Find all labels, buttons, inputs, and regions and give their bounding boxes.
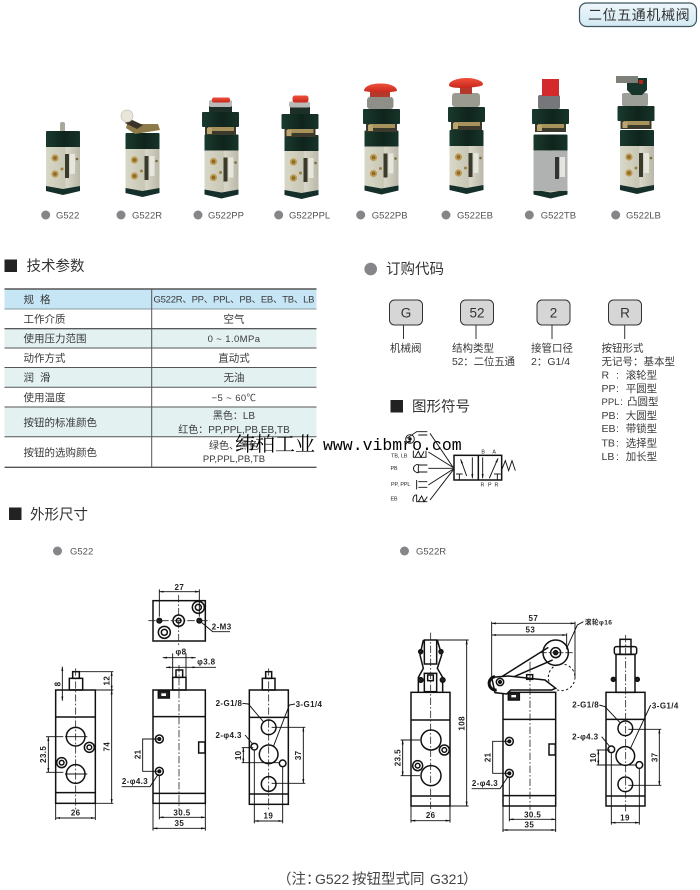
code box: 2: 2：G1/4 [531,356,570,368]
product: G522EB: G522EB [457,210,493,222]
code box: 52: 52：二位五通 [452,355,516,368]
watermark [235,433,462,456]
footnote: G321 [430,871,464,887]
product: G522EB [442,78,493,222]
footnote: （注： [277,871,320,888]
right view: 10 [234,750,243,760]
heading: outline dimensions [9,506,88,524]
right view [572,635,679,825]
left view: 26 [426,811,436,820]
table row labels: 按钮的选购颜色 [24,446,97,459]
right view: 37 [294,750,303,760]
valve graphic symbol: EB [390,497,398,503]
heading: technical parameters [4,258,85,275]
left view [394,633,469,823]
top view: 27 [174,583,184,592]
code box: R: : [616,410,619,422]
valve graphic symbol: PB [390,466,398,472]
table row labels: 工作介质 [24,314,66,326]
valve graphic symbol: B [481,449,485,455]
order code diagram [390,300,675,463]
table row labels [24,293,97,459]
right view: 19 [620,813,630,822]
left view: 12 [103,676,112,686]
product: G522TB: G522TB [541,210,576,222]
right view [216,668,323,823]
left view: 108 [457,716,466,731]
right view: 37 [650,752,659,762]
table row labels: 使用温度 [24,391,66,404]
front view: φ8 [176,647,187,656]
valve graphic symbol: A [492,449,496,455]
code box: 52: 52 [469,306,485,320]
left view: 23.5 [39,746,48,763]
top view: 2-M3 [212,623,232,632]
front view with roller lever [472,614,612,832]
code box: R: 平圆型 [626,382,657,395]
code box: R: 滚轮型 [626,368,657,382]
front view: 2-φ4.3 [122,777,148,786]
footnote: 按钮型式同 [352,871,424,888]
product: G522R [116,110,162,222]
code box: R: : [616,438,619,450]
table row values: 0 ~ 1.0MPa [208,334,261,345]
valve graphic symbol: R [495,483,499,489]
left view: 74 [103,742,112,752]
footnote: ） [463,871,478,888]
front view with roller lever: 53 [525,626,535,635]
right view: 2-φ4.3 [572,733,599,742]
code box: R: PPL [602,397,619,408]
table row labels: 按钮的标准颜色 [24,416,97,429]
product: G522PB [356,84,408,222]
code box: R [602,300,675,463]
code box: R: : [616,383,619,395]
heading: outline dimensions: 外形尺寸 [30,506,88,524]
product: G522PP: G522PP [208,210,244,222]
right view: 10 [589,753,598,763]
table row labels: 使用压力范围 [24,332,86,345]
dimension drawing: G522R [394,614,679,832]
watermark: 纬柏工业 [235,433,315,456]
product: G522TB [525,79,576,222]
front view with roller lever: 57 [528,614,538,623]
table: technical parameters [4,289,316,467]
heading: order code: 订购代码 [386,261,444,278]
front view with roller lever: 30.5 [524,810,541,819]
footnote: G522 [315,871,349,887]
valve graphic symbol: R [481,483,485,489]
right view: 2-φ4.3 [216,731,242,740]
code box: R: 加长型 [626,450,657,463]
table row values: 直动式 [218,352,250,364]
right view: 19 [263,812,273,821]
product: G522R: G522R [132,210,162,222]
table row labels: 润滑 [24,371,50,384]
code box: 52 [452,300,516,368]
product: G522LB: G522LB [626,210,661,222]
right view: 3-G1/4 [652,702,679,711]
table row values: 无油 [224,371,244,384]
table row labels: 规格 [24,293,51,306]
table row values: 黑色：LB [213,409,255,422]
front view: 35 [174,819,184,828]
front view with roller lever: 2-φ4.3 [472,779,498,788]
footnote [277,871,478,888]
left view: 8 [54,681,63,686]
code box: R: 大圆型 [626,409,657,422]
watermark: www.vibmro.com [323,436,462,455]
front view with roller lever: 滚轮φ16 [585,618,612,627]
code box: R: : [616,370,619,382]
code box: G: 机械阀 [390,342,422,354]
code box: R: TB [602,438,615,450]
code box: G [390,300,422,354]
valve graphic symbol: PP, PPL [391,482,410,488]
front view with roller lever: 21 [484,752,493,762]
heading: technical parameters: 技术参数 [26,258,85,275]
table row labels: 动作方式 [24,352,66,364]
code box: R: 凸圆型 [627,395,658,408]
code box: R: 按钮形式 [602,342,644,354]
right view: 3-G1/4 [296,700,323,709]
code box: R: 选择型 [626,436,657,450]
heading: graphic symbol: 图形符号 [412,398,470,416]
left view: 26 [71,809,81,818]
table row values: PP,PPL,PB,TB [203,454,265,465]
title badge [580,3,696,26]
front view: φ3.8 [197,658,216,667]
title badge: 二位五通机械阀 [588,7,690,23]
product: G522PP [194,98,244,222]
drawing label: G522R: G522R [416,546,446,558]
drawing label: G522R [400,546,446,558]
product: G522PPL [274,96,330,222]
right view: 2-G1/8 [572,701,599,710]
drawing label: G522 [53,546,93,558]
dimension drawing: G522 [39,583,323,831]
valve graphic symbol: P [488,483,492,489]
code box: R: R [602,370,610,382]
front view: 21 [134,749,143,759]
product: G522LB [611,76,661,222]
table row values: 红色：PP,PPL,PB,EB,TB [178,423,290,436]
front view: 30.5 [173,808,191,817]
heading: graphic symbol [390,398,470,416]
right view: 2-G1/8 [216,699,243,708]
heading: order code [364,261,444,278]
code box: 2: 接管口径 [531,342,573,354]
table row values [154,294,314,465]
code box: 2 [531,300,573,368]
table row values: 空气 [224,312,245,326]
code box: R: PP [602,383,616,395]
product: G522: G522 [56,210,79,222]
product: G522 [41,122,80,222]
code box: G: G [401,306,411,320]
product photos row [41,76,661,222]
valve graphic symbol [390,432,515,503]
product: G522PPL: G522PPL [289,210,330,222]
code box: R: : [616,451,619,463]
code box: R: LB [602,451,614,463]
left view [39,667,113,820]
left view: 23.5 [394,749,403,766]
table row values: G522R、PP、PPL、PB、EB、TB、LB [154,294,314,306]
drawing label: G522: G522 [70,546,93,558]
code box: R: PB [602,410,616,422]
code box: R: 无记号：基本型 [602,355,675,368]
code box: R: 带锁型 [626,422,657,435]
valve graphic symbol: TB, LB [391,454,408,460]
code box: R: : [620,396,623,408]
code box: R: : [616,423,619,435]
front view [122,647,216,831]
table row values: −5 ~ 60℃ [212,393,257,404]
code box: R: R [620,306,630,320]
code box: R: EB [602,423,616,435]
code box: 2: 2 [550,306,557,320]
product: G522PB: G522PB [372,210,408,222]
code box: 52: 结构类型 [452,342,494,354]
top view [148,583,232,646]
front view with roller lever: 35 [524,821,534,830]
table row values: 绿色、黑色 [209,439,259,452]
